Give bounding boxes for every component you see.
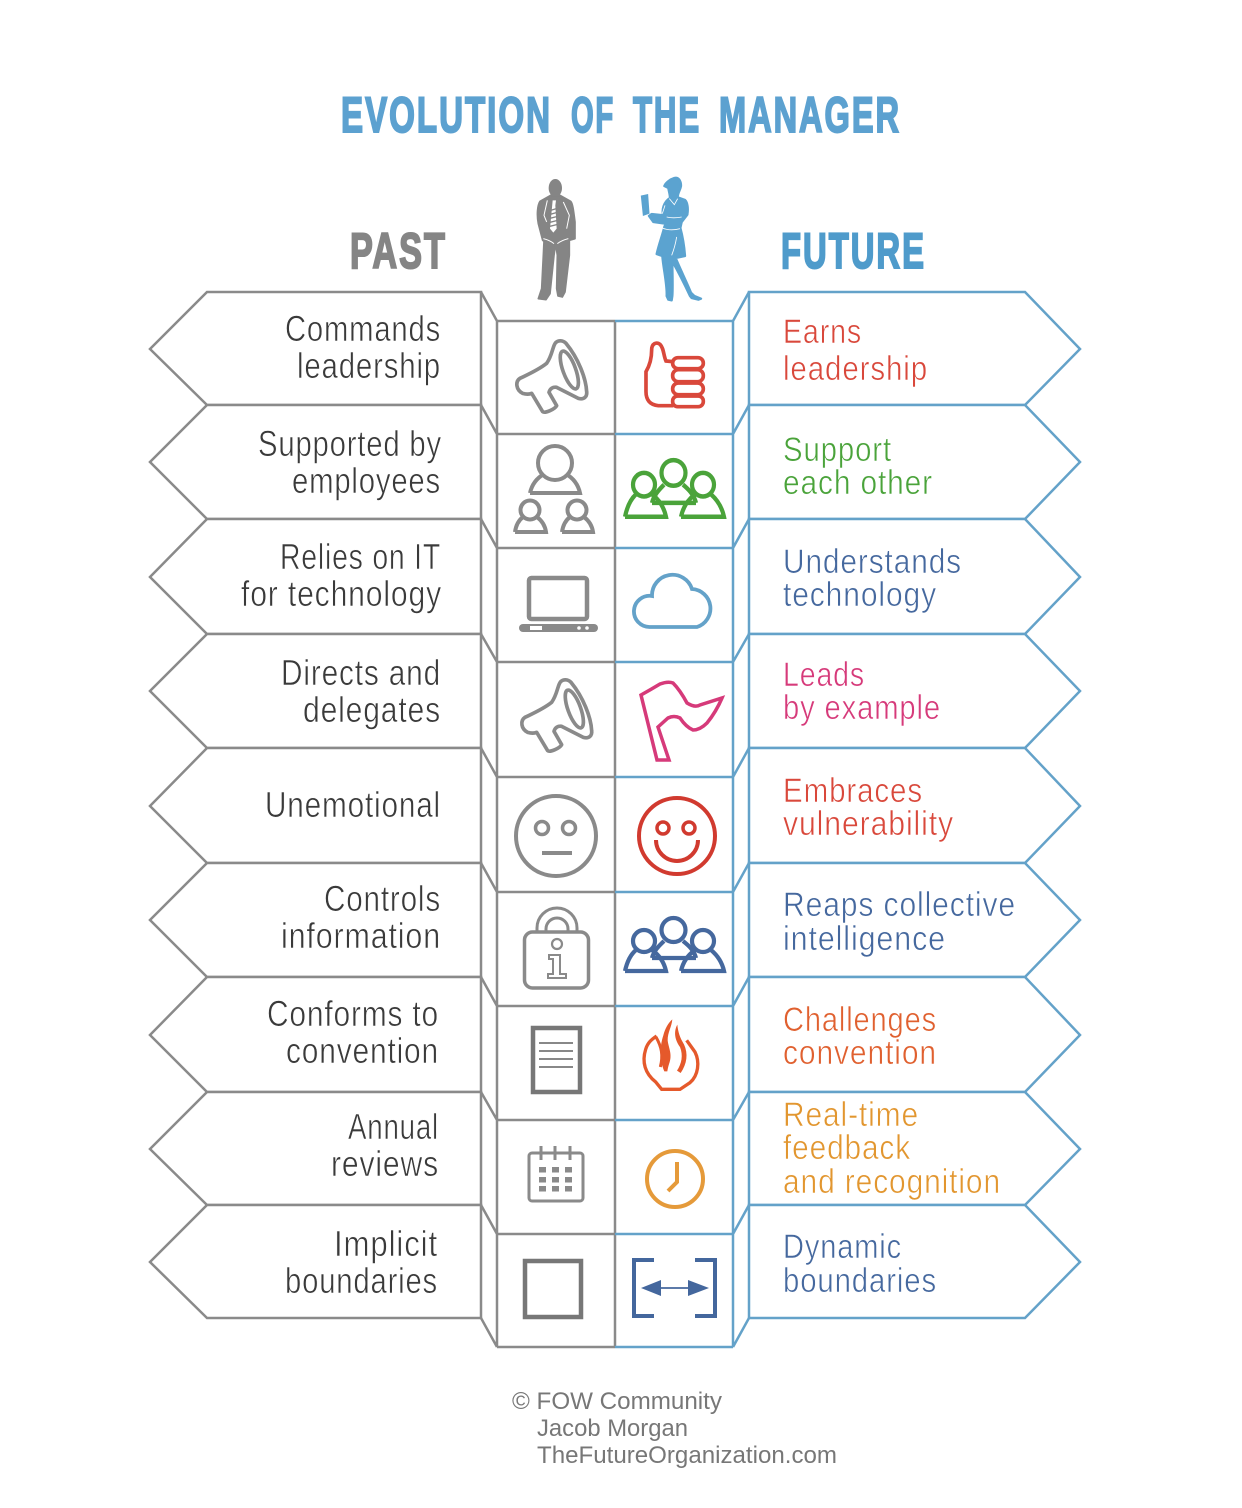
text: earns leadership: leadership: [783, 350, 928, 388]
footer credit: © FOW Community: [512, 1388, 722, 1415]
text: controls information: Controls: [324, 878, 441, 919]
icon: brackets with double arrow: [634, 1260, 715, 1316]
text: supported by employees: [258, 423, 442, 501]
centre grid: past icon cells: [481, 292, 615, 1347]
text: understands technology: Understands: [783, 543, 962, 581]
text: understands technology: [783, 543, 962, 614]
text: supported by employees: Supported by: [258, 423, 442, 464]
title: OF: [571, 87, 615, 143]
text: supported by employees: employees: [292, 460, 441, 501]
heading: past: PAST: [350, 223, 447, 279]
icon: businesswoman silhouette: [641, 178, 701, 300]
icon: cloud: [634, 575, 710, 627]
icon: flame: [644, 1019, 698, 1089]
text: implicit boundaries: [285, 1223, 438, 1301]
text: embraces vulnerability: vulnerability: [783, 805, 954, 843]
text: leads by example: [783, 656, 941, 727]
text: understands technology: technology: [783, 576, 937, 614]
text: dynamic boundaries: boundaries: [783, 1262, 937, 1300]
text: challenges convention: Challenges: [783, 1001, 937, 1039]
text: support each other: [783, 431, 933, 502]
text: dynamic boundaries: Dynamic: [783, 1228, 902, 1266]
text: directs and delegates: Directs and: [281, 652, 441, 693]
future labels: [783, 313, 1016, 1300]
past column: chevron panels: [150, 292, 481, 1318]
text: real-time feedback and recognition: and recognition: [783, 1163, 1001, 1201]
text: directs and delegates: delegates: [303, 689, 441, 730]
text: embraces vulnerability: [783, 772, 954, 843]
text: implicit boundaries: boundaries: [285, 1260, 438, 1301]
icon: empty square: [525, 1261, 581, 1317]
footer credit: Jacob Morgan: [537, 1415, 688, 1442]
text: conforms to convention: convention: [286, 1030, 439, 1071]
heading: future: FUTURE: [781, 223, 926, 279]
text: reaps collective intelligence: Reaps collective: [783, 886, 1016, 924]
text: earns leadership: Earns: [783, 313, 862, 351]
text: annual reviews: [331, 1106, 439, 1184]
text: reaps collective intelligence: intelligence: [783, 920, 946, 958]
icon: calendar: [529, 1146, 583, 1201]
text: leads by example: by example: [783, 689, 941, 727]
text: reaps collective intelligence: [783, 886, 1016, 958]
text: conforms to convention: [267, 993, 439, 1071]
icon: laptop: [519, 578, 598, 632]
text: controls information: information: [281, 915, 441, 956]
text: real-time feedback and recognition: feedback: [783, 1129, 911, 1167]
future column: chevron panels: [749, 292, 1080, 1318]
text: commands leadership: [285, 308, 441, 386]
text: challenges convention: convention: [783, 1034, 937, 1072]
text: support each other: each other: [783, 464, 933, 502]
footer credit: [512, 1388, 837, 1469]
icon: smiling face: [639, 798, 715, 874]
icon: flag: [641, 682, 722, 760]
text: controls information: [281, 878, 441, 956]
text: unemotional: Unemotional: [265, 784, 441, 825]
icon: manager with two employees: [515, 446, 593, 532]
text: leads by example: Leads: [783, 656, 865, 694]
icon: thumbs up: [646, 343, 703, 407]
text: directs and delegates: [281, 652, 441, 730]
text: support each other: Support: [783, 431, 892, 469]
past labels: [241, 308, 442, 1301]
text: relies on IT: [241, 536, 442, 614]
centre grid: future icon cells: [615, 292, 749, 1347]
icon: padlock with info: [524, 908, 588, 988]
icon: megaphone 1: [517, 341, 587, 412]
icon: neutral face: [516, 796, 596, 876]
title: [341, 87, 901, 143]
text: conforms to convention: Conforms to: [267, 993, 439, 1034]
text: relies on IT: Relies on IT: [280, 536, 441, 577]
title: MANAGER: [719, 87, 901, 143]
text: real-time feedback and recognition: [783, 1096, 1001, 1201]
text: commands leadership: Commands: [285, 308, 441, 349]
text: real-time feedback and recognition: Real-time: [783, 1096, 919, 1134]
text: dynamic boundaries: [783, 1228, 937, 1300]
icon: blue team: [625, 918, 724, 971]
text: earns leadership: [783, 313, 928, 388]
footer credit: TheFutureOrganization.com: [537, 1442, 837, 1469]
text: implicit boundaries: Implicit: [334, 1223, 438, 1264]
icon: document: [533, 1028, 580, 1092]
text: commands leadership: leadership: [297, 345, 441, 386]
text: annual reviews: reviews: [331, 1143, 439, 1184]
text: embraces vulnerability: Embraces: [783, 772, 923, 810]
icon: green team: [625, 460, 724, 517]
text: challenges convention: [783, 1001, 937, 1072]
text: annual reviews: Annual: [348, 1106, 439, 1147]
icon: clock: [647, 1151, 703, 1207]
text: relies on IT: for technology: [241, 573, 442, 614]
title: THE: [633, 87, 701, 143]
icon: businessman silhouette: [537, 179, 575, 300]
icon: megaphone 2: [522, 680, 592, 751]
title: EVOLUTION: [341, 87, 552, 143]
